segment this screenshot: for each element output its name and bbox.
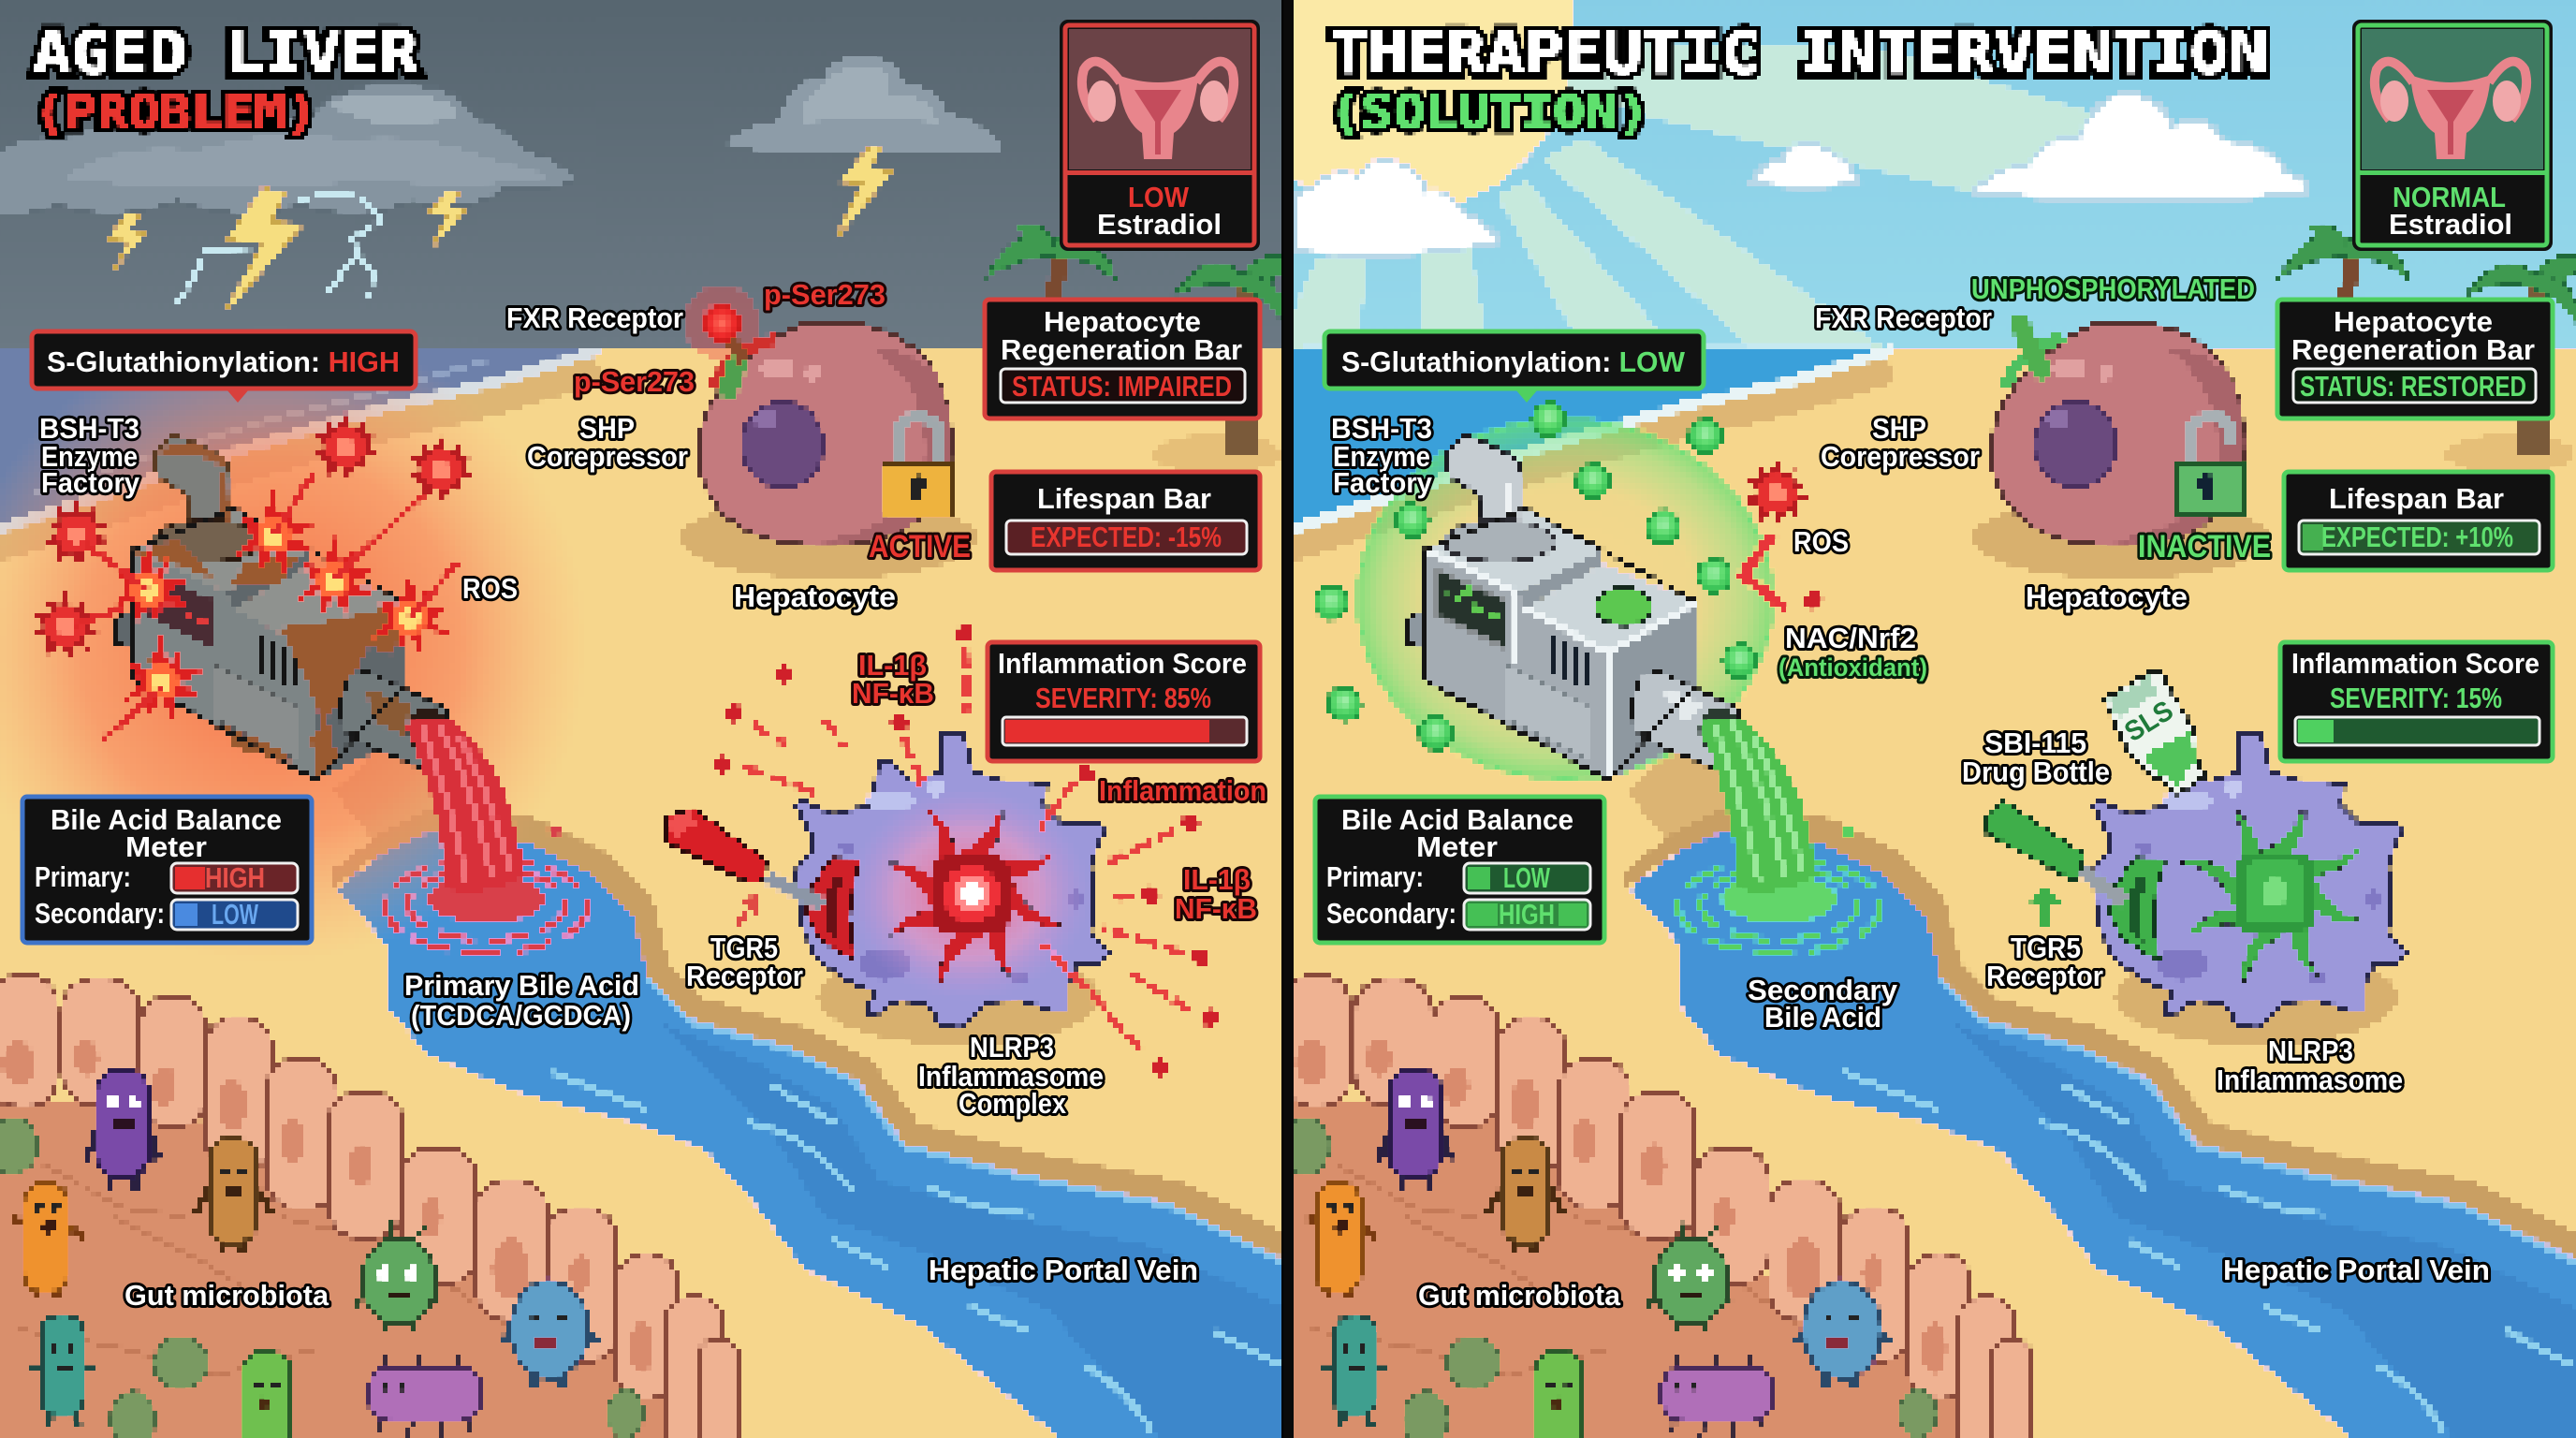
secondary pill high: HIGH <box>1499 898 1555 931</box>
panel: bile acid meter, solution: Primary: <box>1326 860 1424 893</box>
labels: solution side: Enzyme <box>1333 440 1430 473</box>
labels: solution side: UNPHOSPHORYLATED <box>1971 272 2255 305</box>
ocean <box>1293 348 1892 529</box>
labels: problem side: p-Ser273 <box>574 365 695 398</box>
panel: bile acid meter, solution: Meter <box>1416 830 1498 863</box>
labels: problem side: IL-1β <box>858 649 927 682</box>
labels: solution side: Bile Acid <box>1764 1001 1881 1034</box>
labels: solution side: Receptor <box>1986 960 2103 992</box>
labels: problem side: BSH-T3 <box>39 412 139 445</box>
thin lightning <box>177 193 382 305</box>
padlock locked <box>883 417 953 518</box>
labels: solution side: Corepressor <box>1821 440 1980 473</box>
icon: uterus <box>1082 62 1234 159</box>
panel: inflammation score 15% <box>2280 642 2553 761</box>
ground: sand, river, gut wall <box>1281 348 2576 1438</box>
labels: solution side: NLRP3 <box>2268 1034 2353 1067</box>
labels: solution side: Inflammasome <box>2217 1064 2403 1096</box>
FXR receptor unphosphorylated <box>2006 324 2064 388</box>
gut microbiota creatures <box>1306 1071 1892 1438</box>
panel: inflammation score 85% <box>988 642 1260 761</box>
primary pill high: HIGH <box>205 861 265 894</box>
primary pill low <box>1464 861 1590 894</box>
labels: problem side: Hepatocyte <box>734 580 896 613</box>
sun rays <box>1294 37 2247 348</box>
panel: aged liver scene <box>0 0 1318 1438</box>
hepatocyte <box>1971 322 2271 580</box>
labels: problem side: p-Ser273 <box>764 278 886 311</box>
panel: hepatocyte regeneration, restored <box>2277 300 2553 418</box>
stormy sky <box>0 0 1288 356</box>
labels: problem side: NLRP3 <box>970 1031 1054 1064</box>
TGR5 arrow up <box>2033 889 2057 929</box>
panel: bile acid meter, problem: Meter <box>125 830 207 863</box>
labels: solution side <box>1331 272 2490 1312</box>
green antioxidant bubbles <box>1312 401 1759 752</box>
panel: therapeutic scene <box>1223 0 2576 1438</box>
antioxidant shield <box>1357 419 1773 779</box>
bile stream secondary <box>1678 719 1881 953</box>
panel: hepatocyte regeneration, impaired <box>985 300 1260 418</box>
panel: S-Glutathionylation high <box>32 331 416 403</box>
labels: solution side: NAC/Nrf2 <box>1785 622 1916 654</box>
panel: bile acid meter, problem <box>22 797 312 943</box>
padlock open <box>2175 416 2245 516</box>
subtitle: problem: (PROBLEM) <box>34 85 317 139</box>
panel: lifespan, -15% <box>991 472 1260 570</box>
panel: lifespan, +10% <box>2284 472 2553 570</box>
panel: normal estradiol: NORMAL <box>2393 181 2506 213</box>
labels: solution side: BSH-T3 <box>1331 412 1432 445</box>
labels: solution side: (Antioxidant) <box>1778 653 1927 682</box>
labels: problem side: Primary Bile Acid <box>404 969 639 1002</box>
labels: solution side: Secondary <box>1748 974 1898 1006</box>
primary pill low: LOW <box>1503 861 1551 894</box>
labels: problem side: IL-1β <box>1183 863 1251 896</box>
panel: inflammation score 85%: Inflammation Score <box>998 647 1247 680</box>
panel: hepatocyte regeneration, restored: Hepatocyte <box>2334 305 2493 338</box>
panel: hepatocyte regeneration, restored: Regeneration Bar <box>2291 333 2535 366</box>
panel: bile acid meter, problem: Primary: <box>35 860 131 893</box>
labels: problem side: (TCDCA/GCDCA) <box>411 999 631 1032</box>
labels: solution side: FXR Receptor <box>1815 301 1992 334</box>
labels: solution side: INACTIVE <box>2138 529 2271 565</box>
labels: problem side: Complex <box>959 1087 1067 1120</box>
panel: hepatocyte regeneration, impaired: STATUS: IMPAIRED <box>1012 370 1232 403</box>
labels: problem side: SHP <box>579 412 635 445</box>
NLRP3 inflammasome inhibited <box>1986 735 2408 1046</box>
labels: problem side: ACTIVE <box>869 529 971 565</box>
palm trees <box>2279 219 2576 412</box>
labels: solution side: Factory <box>1333 466 1433 499</box>
title: therapeutic intervention: THERAPEUTIC INTERVENTION <box>1329 19 2268 87</box>
title: aged liver <box>33 19 419 139</box>
primary pill high <box>171 861 298 894</box>
labels: solution side: SBI-115 <box>1984 726 2086 759</box>
labels: problem side: Corepressor <box>527 440 688 473</box>
title: therapeutic intervention <box>1329 19 2268 139</box>
inflammation rays and dots <box>743 648 1191 1049</box>
red ROS bursts <box>31 412 476 740</box>
labels: problem side: NF-κB <box>852 677 934 710</box>
secondary pill high <box>1464 898 1590 931</box>
labels: solution side: Hepatocyte <box>2026 580 2188 613</box>
ROS neutralised <box>1742 458 1823 610</box>
NLRP3 inflammasome activated <box>665 735 1111 1046</box>
TGR5 arrow <box>737 899 757 927</box>
hepatocyte <box>679 322 978 580</box>
labels: problem side: TGR5 <box>710 932 778 964</box>
icon: uterus <box>2375 62 2526 159</box>
red glow <box>0 382 562 938</box>
storm cloud large <box>0 82 575 214</box>
labels: solution side: Gut microbiota <box>1418 1279 1621 1312</box>
secondary pill low <box>171 898 298 931</box>
labels: solution side: SHP <box>1872 412 1926 445</box>
divider <box>1283 0 1294 1438</box>
clouds <box>1294 94 2306 255</box>
gut microbiota creatures <box>13 1071 599 1438</box>
labels: solution side: TGR5 <box>2011 932 2081 964</box>
title: aged liver: AGED LIVER <box>33 19 419 87</box>
secondary pill low: LOW <box>212 898 259 931</box>
labels: problem side: Receptor <box>686 960 803 992</box>
panel: hepatocyte regeneration, impaired: Regeneration Bar <box>1001 333 1242 366</box>
factory rusted <box>115 435 449 780</box>
bottle label: SLS <box>2119 695 2179 748</box>
lightning bolts <box>109 147 891 315</box>
panel: bile acid meter, problem: Bile Acid Balance <box>51 803 282 836</box>
bile stream primary <box>386 719 588 953</box>
ground: sand, river, gut wall <box>0 348 1318 1438</box>
panel: bile acid meter, solution <box>1315 797 1604 943</box>
labels: problem side <box>39 278 1266 1312</box>
panel: normal estradiol <box>2355 22 2550 248</box>
labels: problem side: Hepatic Portal Vein <box>929 1254 1198 1286</box>
FXR receptor phosphorylated <box>684 286 777 398</box>
storm cloud small <box>727 56 1003 154</box>
panel: normal estradiol: Estradiol <box>2389 208 2512 241</box>
panel: lifespan, -15%: Lifespan Bar <box>1037 482 1211 515</box>
ocean <box>0 348 599 529</box>
labels: problem side: NF-κB <box>1175 892 1257 925</box>
labels: problem side: Factory <box>41 466 140 499</box>
panel: inflammation score 85%: SEVERITY: 85% <box>1035 682 1211 714</box>
subtitle: solution: (SOLUTION) <box>1329 85 1649 139</box>
sun <box>1223 0 1575 213</box>
palm trees <box>984 225 1281 320</box>
panel: hepatocyte regeneration, impaired: Hepatocyte <box>1044 305 1201 338</box>
labels: problem side: Gut microbiota <box>124 1279 329 1312</box>
panel: S-Glutathionylation high: S-Glutathionylation: HIGH <box>47 345 400 378</box>
panel: lifespan, -15%: EXPECTED: -15% <box>1031 521 1222 553</box>
panel: lifespan, +10%: EXPECTED: +10% <box>2321 521 2513 553</box>
factory clean <box>1407 435 1741 780</box>
labels: problem side: Inflammasome <box>918 1060 1104 1093</box>
panel: inflammation score 15%: SEVERITY: 15% <box>2330 682 2502 714</box>
labels: solution side: Hepatic Portal Vein <box>2223 1254 2490 1286</box>
panel: S-Glutathionylation low: S-Glutathionylation: LOW <box>1341 345 1686 378</box>
panel: bile acid meter, solution: Secondary: <box>1326 897 1456 930</box>
labels: problem side: FXR Receptor <box>506 301 683 334</box>
SBI-115 drug bottle <box>2104 671 2206 794</box>
labels: solution side: ROS <box>1793 525 1849 558</box>
panel: low estradiol: LOW <box>1128 181 1190 213</box>
labels: problem side: Inflammation <box>1099 774 1266 807</box>
panel: bile acid meter, problem: Secondary: <box>35 897 165 930</box>
panel: lifespan, +10%: Lifespan Bar <box>2329 482 2504 515</box>
panel: S-Glutathionylation low <box>1325 331 1704 403</box>
panel: low estradiol <box>1062 22 1257 248</box>
labels: problem side: Enzyme <box>41 440 138 473</box>
labels: solution side: Drug Bottle <box>1962 756 2110 788</box>
panel: low estradiol: Estradiol <box>1097 208 1222 241</box>
labels: problem side: ROS <box>462 572 518 605</box>
panel: inflammation score 15%: Inflammation Score <box>2291 647 2539 680</box>
panel: bile acid meter, solution: Bile Acid Balance <box>1341 803 1573 836</box>
bright sky <box>1294 0 2576 356</box>
